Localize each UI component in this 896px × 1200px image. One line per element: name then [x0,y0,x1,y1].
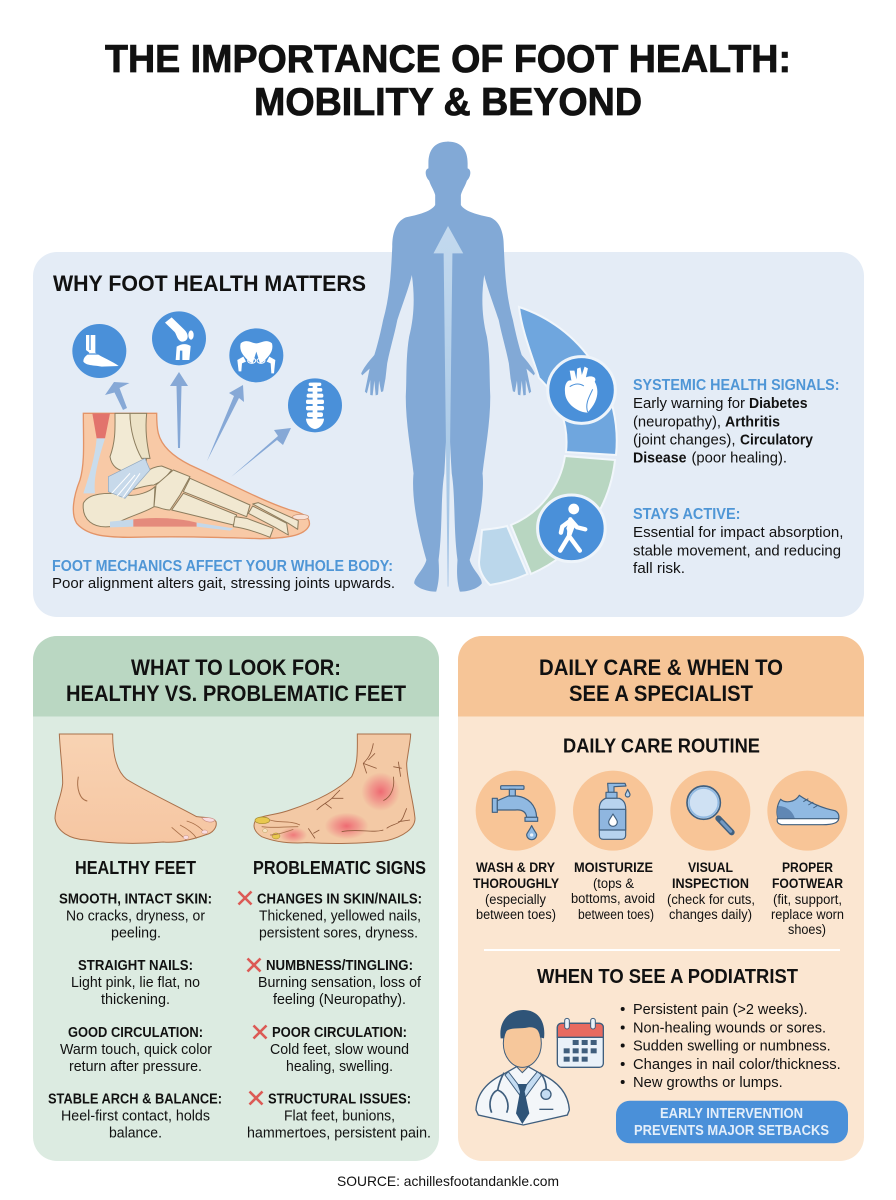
text: systemic health signals [633,377,840,466]
icon: heart [548,357,615,423]
item: good circulation: Warm touch, quick color [60,1042,212,1058]
column: problematic signs [238,857,431,1142]
icon: spine [288,378,342,432]
step: proper footwear [771,860,844,937]
item: smooth skin: peeling. [111,926,161,942]
column: healthy feet [48,857,222,1142]
step: proper footwear: PROPER [782,860,833,875]
icon: walking person [538,495,605,562]
item: straight nails: thickening. [101,992,170,1008]
item: skin and nail changes: CHANGES IN SKIN/NAILS: [257,891,422,907]
list: when to see a podiatrist [621,1001,841,1091]
icon: pelvis and hips [229,328,283,382]
heading: what to look for: HEALTHY VS. PROBLEMATIC FEET [66,681,406,706]
text: systemic health signals: (joint changes), [633,432,736,448]
icon: magnifying glass [670,771,750,851]
illustration: healthy foot [55,734,216,843]
illustration: problematic foot [254,734,415,843]
item: numbness: NUMBNESS/TINGLING: [266,958,413,974]
source line: SOURCE: achillesfootandankle.com [337,1173,559,1189]
figure: human body silhouette [361,142,535,592]
panel: why foot health matters [33,142,864,617]
item: structural issues: hammertoes, persistent pain. [247,1126,431,1142]
icon: knee joint [152,311,206,365]
step: moisturize: (tops & [593,876,634,891]
item: structural issues [247,1092,431,1142]
item: smooth skin: No cracks, dryness, or [66,909,205,925]
step: wash and dry: between toes) [476,907,556,922]
arrows: foot forces rising to joints [105,372,291,477]
step: moisturize: between toes) [578,907,654,922]
step: moisturize [571,860,655,922]
subheading: when to see a podiatrist: WHEN TO SEE A PODIATRIST [537,966,798,988]
text: stays active [633,506,844,577]
callout: early intervention: PREVENTS MAJOR SETBACKS [634,1123,829,1139]
heading: daily care and when to see a specialist: SEE A SPECIALIST [569,681,753,706]
title: THE IMPORTANCE OF FOOT HEALTH: [105,38,791,81]
heading: what to look for [66,655,406,706]
step: proper footwear: FOOTWEAR [772,876,843,891]
item: skin and nail changes: persistent sores, dryness. [259,926,418,942]
item: skin and nail changes [238,891,422,942]
item: stable arch: Heel-first contact, holds [61,1109,210,1125]
item: good circulation [60,1025,212,1075]
icon: ankle and foot [72,324,126,378]
item: straight nails [71,958,200,1008]
text: stays active: fall risk. [633,560,685,577]
item: straight nails: STRAIGHT NAILS: [78,958,193,974]
icon: calendar [557,1018,603,1067]
step: proper footwear: shoes) [788,922,826,937]
step: visual inspection [667,860,755,922]
text: foot mechanics [52,558,395,592]
list: when to see a podiatrist: Changes in nail color/thickness. [633,1056,841,1073]
item: poor circulation: healing, swelling. [286,1059,393,1075]
step: wash and dry: (especially [485,892,546,907]
step: wash and dry: THOROUGHLY [473,876,559,891]
callout: early intervention [616,1101,848,1143]
step: moisturize: bottoms, avoid [571,891,655,906]
item: poor circulation: POOR CIRCULATION: [272,1025,407,1041]
title [105,38,791,124]
item: numbness: Burning sensation, loss of [258,975,422,991]
heading: daily care and when to see a specialist: DAILY CARE & WHEN TO [539,655,783,680]
item: stable arch: balance. [109,1126,162,1142]
step: visual inspection: VISUAL [688,860,733,875]
text: systemic health signals: (poor healing). [692,450,787,466]
step: visual inspection: INSPECTION [672,876,749,891]
chart: ring of health segments [479,307,617,585]
item: numbness [248,958,422,1008]
item: smooth skin: SMOOTH, INTACT SKIN: [59,891,212,907]
item: straight nails: Light pink, lie flat, no [71,975,200,991]
icon: faucet [476,771,556,851]
panel: healthy vs problematic feet [33,636,439,1161]
list: when to see a podiatrist: New growths or lumps. [633,1074,783,1091]
item: stable arch [48,1092,222,1142]
step: moisturize: MOISTURIZE [574,860,653,875]
subheading: daily care routine: DAILY CARE ROUTINE [563,736,760,758]
step: wash and dry [473,860,559,922]
list: when to see a podiatrist: Persistent pain (>2 weeks). [633,1001,808,1018]
icon: shoe [767,771,847,851]
heading: what to look for: WHAT TO LOOK FOR: [131,655,341,680]
callout: early intervention: EARLY INTERVENTION [660,1106,803,1122]
step: visual inspection: changes daily) [669,907,752,922]
item: poor circulation [254,1025,409,1075]
text: systemic health signals: Disease [633,450,686,466]
text: systemic health signals: Circulatory [740,432,814,448]
item: stable arch: STABLE ARCH & BALANCE: [48,1092,222,1108]
text: systemic health signals: Arthritis [725,414,780,430]
text: stays active: STAYS ACTIVE: [633,506,740,523]
text: systemic health signals: Early warning for [633,395,745,412]
item: skin and nail changes: Thickened, yellowed nails, [259,909,421,925]
step: visual inspection: (check for cuts, [667,892,755,907]
column: healthy feet: HEALTHY FEET [75,857,197,878]
step: wash and dry: WASH & DRY [476,860,555,875]
text: stays active: stable movement, and reducing [633,542,841,560]
step: proper footwear: (fit, support, [773,892,842,907]
item: structural issues: STRUCTURAL ISSUES: [268,1092,411,1108]
text: systemic health signals: Diabetes [749,395,808,412]
text: systemic health signals: (neuropathy), [633,414,721,430]
step: proper footwear: replace worn [771,907,844,922]
illustration: doctor [476,1010,569,1125]
item: numbness: feeling (Neuropathy). [273,992,406,1008]
text: stays active: Essential for impact absorption, [633,524,844,541]
item: good circulation: return after pressure. [69,1059,202,1075]
item: poor circulation: Cold feet, slow wound [270,1042,409,1058]
text: foot mechanics: FOOT MECHANICS AFFECT YOUR WHOLE BODY: [52,558,393,575]
list: when to see a podiatrist: Non-healing wounds or sores. [633,1020,826,1037]
item: good circulation: GOOD CIRCULATION: [68,1025,203,1041]
text: foot mechanics: Poor alignment alters gait, stressing joints upwards. [52,575,395,592]
panel: daily care and specialist [458,636,864,1161]
diagram: foot skeleton anatomy [73,413,309,539]
heading: why foot health matters: WHY FOOT HEALTH MATTERS [53,271,366,296]
text: systemic health signals: SYSTEMIC HEALTH SIGNALS: [633,377,840,394]
list: when to see a podiatrist: Sudden swelling or numbness. [633,1038,831,1055]
column: problematic signs: PROBLEMATIC SIGNS [253,857,426,878]
item: smooth skin [59,891,212,942]
icon: lotion bottle [573,771,653,851]
heading: daily care and when to see a specialist [539,655,783,706]
title: MOBILITY & BEYOND [254,81,642,124]
item: structural issues: Flat feet, bunions, [284,1109,395,1125]
arrow: rising through the body [433,226,463,587]
